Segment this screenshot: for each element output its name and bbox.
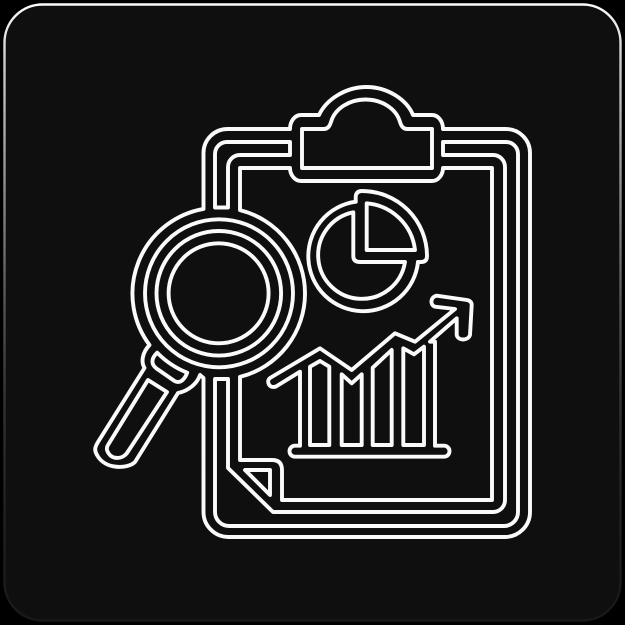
bar 2 xyxy=(342,374,362,445)
pie chart body outer xyxy=(308,202,418,311)
magnifier lens rings xyxy=(145,219,293,367)
pie wedge inner xyxy=(367,203,415,250)
clipboard middle band, right and bottom xyxy=(215,142,518,526)
page fold triangle xyxy=(245,470,270,495)
clip inner shape xyxy=(302,100,432,168)
pie chart body inner xyxy=(318,212,405,299)
bar 3 xyxy=(373,350,392,445)
icon: clipboard with magnifier and charts xyxy=(95,87,530,537)
clipboard middle band xyxy=(215,142,290,208)
bar 1 xyxy=(310,361,329,445)
growth arrow and chart base xyxy=(268,296,472,457)
clipboard outer outline with magnifier rim and handle xyxy=(95,87,530,537)
magnifier handle inner xyxy=(107,380,167,458)
pie wedge outer xyxy=(356,191,427,262)
paper sheet outline with magnifier rim xyxy=(240,168,492,500)
magnifier ferrule xyxy=(152,353,187,382)
bar 4 xyxy=(403,347,424,445)
